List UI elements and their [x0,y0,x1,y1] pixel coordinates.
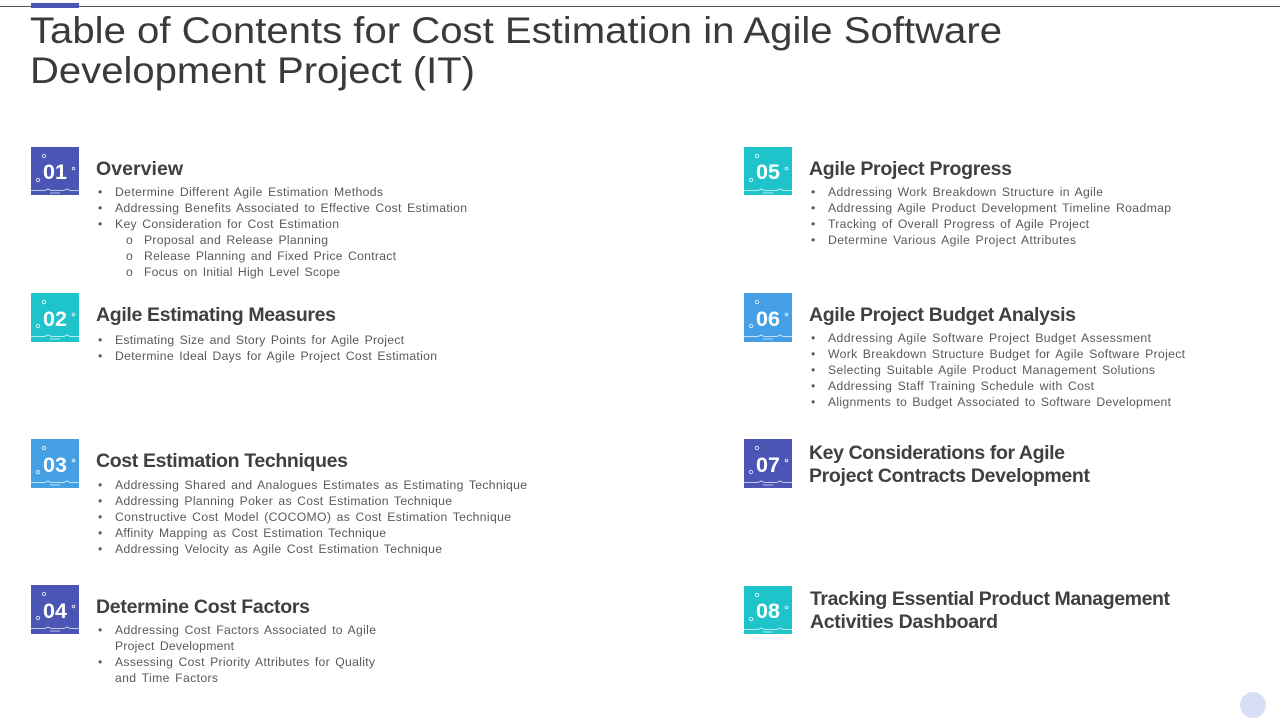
section 04: determine cost factors [31,585,376,685]
list 05: • [811,201,815,215]
badge 01 [31,147,79,195]
list 03: • [98,510,102,524]
list 04: • [98,623,102,637]
title: Development Project (IT) [30,50,475,91]
heading 04: Determine Cost Factors [96,596,310,618]
badge 05 [744,147,792,195]
list 06: Alignments to Budget Associated to Software Development [828,395,1172,409]
badge 07: 07 [756,453,780,477]
list 03: Addressing Planning Poker as Cost Estimation Technique [115,494,452,508]
list 01: • [98,185,102,199]
heading 07 [809,442,1090,487]
top accent tab [31,3,79,8]
list 03: Constructive Cost Model (COCOMO) as Cost Estimation Technique [115,510,511,524]
list 06: Addressing Staff Training Schedule with Cost [828,379,1095,393]
list 03: • [98,494,102,508]
list 01: Proposal and Release Planning [144,233,328,247]
list 02: • [98,349,102,363]
list 04: Project Development [115,639,235,653]
list 06: Work Breakdown Structure Budget for Agile Software Project [828,347,1186,361]
list 01: Determine Different Agile Estimation Methods [115,185,383,199]
list 03 [98,478,527,556]
heading 03: Cost Estimation Techniques [96,450,348,472]
section 07: key considerations [744,439,1090,488]
list 05: Tracking of Overall Progress of Agile Project [828,217,1090,231]
section 05: agile project progress [744,147,1171,247]
list 01: • [98,201,102,215]
heading 02: Agile Estimating Measures [96,304,336,326]
list 01: • [98,217,102,231]
badge 01: 01 [43,160,67,184]
heading 08: Tracking Essential Product Management [810,588,1170,610]
title [30,10,1002,91]
badge 03: 03 [43,453,67,477]
section 02: agile estimating measures [31,293,437,363]
list 01: o [126,233,133,247]
list 03: • [98,478,102,492]
list 06: • [811,347,815,361]
badge 04: 04 [43,599,67,623]
list 04: Assessing Cost Priority Attributes for Quality [115,655,376,669]
list 03: Addressing Velocity as Agile Cost Estimation Technique [115,542,442,556]
heading 07: Project Contracts Development [809,465,1090,487]
list 01 [98,185,467,279]
list 06: • [811,331,815,345]
list 05: • [811,185,815,199]
section 03: cost estimation techniques [31,439,527,556]
badge 07 [744,439,792,488]
section 06: agile project budget analysis [744,293,1186,409]
list 02: • [98,333,102,347]
list 05: Addressing Agile Product Development Timeline Roadmap [828,201,1171,215]
list 06: • [811,379,815,393]
page marker circle [1240,692,1266,718]
heading 06: Agile Project Budget Analysis [809,304,1076,326]
badge 03 [31,439,79,488]
list 02: Determine Ideal Days for Agile Project Cost Estimation [115,349,437,363]
badge 06: 06 [756,307,780,331]
list 05: • [811,233,815,247]
heading 08 [810,588,1170,633]
badge 06 [744,293,792,342]
badge 02 [31,293,79,342]
list 04: Addressing Cost Factors Associated to Agile [115,623,376,637]
list 02 [98,333,437,363]
list 06 [811,331,1186,409]
title: Table of Contents for Cost Estimation in Agile Software [30,10,1002,51]
badge 02: 02 [43,307,67,331]
list 04: and Time Factors [115,671,218,685]
list 01: Addressing Benefits Associated to Effective Cost Estimation [115,201,467,215]
list 03: • [98,542,102,556]
top rule [0,6,1280,7]
list 06: • [811,363,815,377]
heading 01: Overview [96,158,184,180]
section 08: tracking dashboard [744,586,1170,634]
list 01: Focus on Initial High Level Scope [144,265,340,279]
list 03: • [98,526,102,540]
list 06: Selecting Suitable Agile Product Management Solutions [828,363,1155,377]
list 06: • [811,395,815,409]
list 01: Key Consideration for Cost Estimation [115,217,339,231]
heading 07: Key Considerations for Agile [809,442,1065,464]
badge 04 [31,585,79,634]
list 05 [811,185,1171,247]
heading 05: Agile Project Progress [809,158,1012,180]
badge 08 [744,586,792,634]
list 04: • [98,655,102,669]
list 04 [98,623,376,685]
list 05: Addressing Work Breakdown Structure in Agile [828,185,1103,199]
badge 05: 05 [756,160,780,184]
section 01: overview [31,147,467,279]
list 02: Estimating Size and Story Points for Agile Project [115,333,405,347]
list 01: o [126,265,133,279]
list 06: Addressing Agile Software Project Budget Assessment [828,331,1152,345]
list 01: Release Planning and Fixed Price Contract [144,249,397,263]
list 03: Affinity Mapping as Cost Estimation Technique [115,526,386,540]
list 05: • [811,217,815,231]
list 05: Determine Various Agile Project Attributes [828,233,1076,247]
list 01: o [126,249,133,263]
list 03: Addressing Shared and Analogues Estimates as Estimating Technique [115,478,527,492]
heading 08: Activities Dashboard [810,611,998,633]
badge 08: 08 [756,599,780,623]
